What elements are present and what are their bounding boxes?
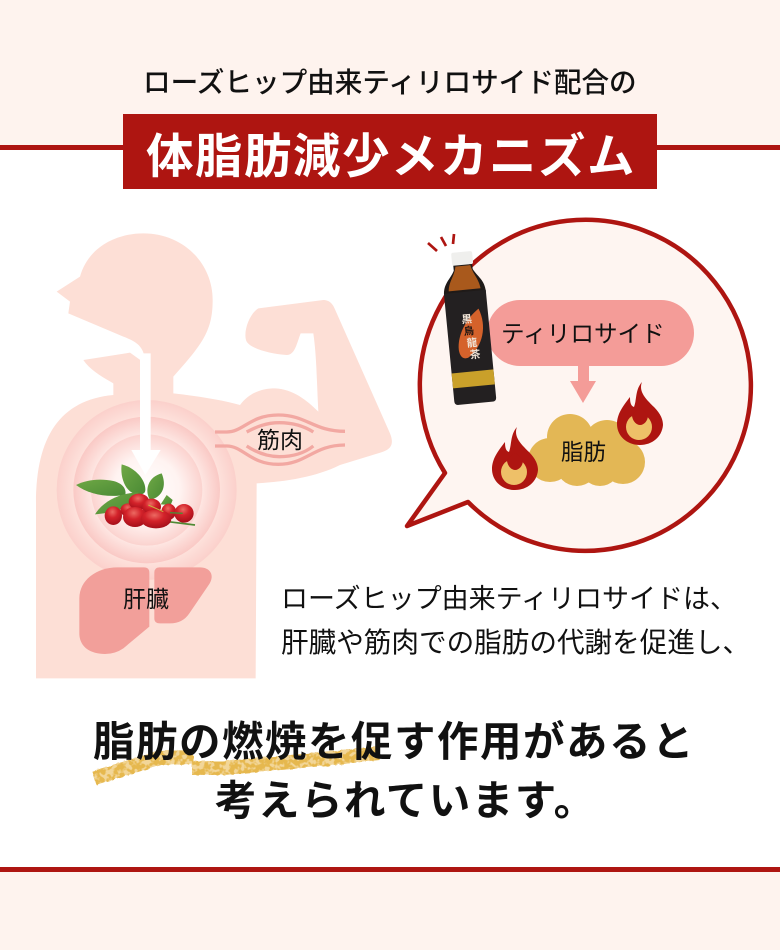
rosehip illustration — [76, 464, 195, 528]
conclusion text: 考えられています。 — [215, 777, 597, 824]
rings around stomach — [57, 400, 237, 580]
body silhouette — [36, 233, 392, 678]
body text: 肝臓や筋肉での脂肪の代謝を促進し、 — [281, 627, 750, 658]
neck and shoulder — [441, 263, 486, 296]
bottle name — [461, 313, 481, 362]
title banner — [123, 114, 657, 189]
berry stems — [148, 505, 163, 512]
top band — [0, 0, 780, 146]
white arrow — [131, 353, 161, 475]
illustration: body — [36, 233, 392, 678]
conclusion text — [93, 718, 695, 824]
subtitle: ローズヒップ由来ティリロサイド配合の — [143, 67, 637, 98]
yellow brush underline — [94, 753, 379, 778]
label: fat: 脂肪 — [561, 440, 606, 465]
fat cloud — [528, 414, 645, 486]
sparkle lines — [428, 234, 454, 251]
bottom band — [0, 868, 780, 950]
leaves — [76, 464, 173, 514]
body text — [281, 584, 750, 658]
cap — [451, 251, 473, 266]
label leaf — [455, 308, 486, 359]
pink arrow — [570, 366, 596, 403]
berries — [105, 494, 194, 528]
label: muscle: 筋肉 — [257, 427, 303, 453]
tirilloside pill — [487, 300, 694, 366]
body text: ローズヒップ由来ティリロサイドは、 — [281, 584, 737, 614]
label: liver: 肝臓 — [123, 586, 169, 612]
bottle name: 龍 — [466, 336, 478, 350]
tirilloside pill: ティリロサイド — [501, 322, 665, 348]
liver — [79, 567, 212, 654]
flame right — [617, 382, 663, 445]
yellow band — [452, 369, 495, 388]
title banner: 体脂肪減少メカニズム — [146, 131, 636, 184]
top red line — [0, 145, 780, 150]
bottle name: 烏 — [463, 324, 475, 338]
stem — [168, 522, 195, 525]
speech bubble — [407, 220, 751, 551]
bottle name: 茶 — [469, 348, 481, 362]
bottle name: 黒 — [461, 313, 473, 326]
muscle lines — [215, 415, 345, 464]
flame left — [492, 427, 538, 490]
bottle — [440, 250, 496, 405]
conclusion text: 脂肪の燃焼を促す作用があると — [93, 718, 695, 765]
bottom red line — [0, 867, 780, 872]
body — [444, 290, 496, 405]
